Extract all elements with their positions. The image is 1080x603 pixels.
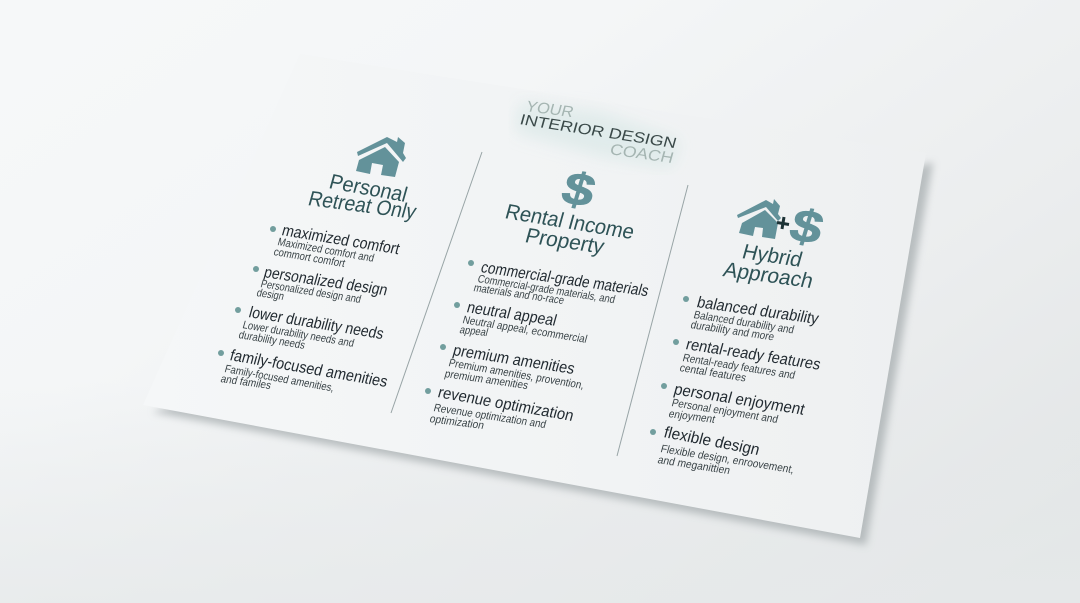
item: maximized comfort: [270, 222, 402, 270]
item: premium amenities: [440, 342, 585, 392]
item: commercial-grade materials: commercial-grade materials: [479, 259, 651, 300]
item: personal enjoyment: Personal enjoyment and: [670, 397, 779, 426]
item: lower durability needs: durability needs: [237, 329, 307, 352]
item: personalized design: design: [255, 287, 285, 303]
item: neutral appeal: neutral appeal: [465, 299, 559, 330]
item: commercial-grade materials: materials and no-race: [472, 282, 565, 307]
item: neutral appeal: appeal: [458, 324, 489, 339]
divider right: [617, 185, 688, 456]
item: family-focused amenities: family-focused amenities: [228, 347, 390, 391]
icon: small dollar: $: [784, 199, 829, 254]
item: commercial-grade materials: Commercial-grade materials, and: [476, 273, 616, 306]
item: revenue optimization: optimization: [428, 413, 485, 432]
item: maximized comfort: commort comfort: [272, 246, 346, 270]
item: premium amenities: premium amenities: [451, 342, 577, 378]
icon: dollar sign: $: [556, 162, 601, 217]
item: balanced durability: balanced durability: [695, 294, 821, 328]
icon: small house: [737, 199, 781, 239]
item: balanced durability: Balanced durability and: [692, 309, 795, 336]
item: maximized comfort: maximized comfort: [280, 222, 402, 258]
logo line: your: YOUR: [524, 98, 576, 121]
item: lower durability needs: Lower durability needs and: [241, 319, 355, 350]
item: balanced durability: durability and more: [689, 319, 775, 343]
heading: rental income property: Property: [523, 224, 607, 259]
item: rental-ready features: cental features: [678, 362, 748, 385]
item: revenue optimization: revenue optimization: [436, 384, 576, 425]
header logo: [515, 98, 680, 168]
item: personalized design: personalized design: [262, 264, 390, 299]
item: family-focused amenities: Family-focused amenities,: [223, 363, 335, 395]
item: flexible design: Flexible design, enroovement,: [659, 443, 795, 476]
item: flexible design: [650, 424, 795, 477]
panel: paper sheet: [143, 54, 926, 538]
divider left: [391, 152, 482, 413]
icon: house plus dollar: [737, 199, 829, 254]
panel: personal retreat: [218, 137, 419, 395]
item: premium amenities: Premium amenities, provention,: [447, 357, 585, 392]
item: revenue optimization: Revenue optimization and: [432, 402, 547, 431]
heading: personal retreat only: [306, 170, 419, 224]
heading: hybrid approach: Hybrid: [740, 240, 805, 272]
paper shadow: [152, 162, 933, 545]
icon: plus sign: [777, 217, 789, 229]
item: flexible design: and meganittien: [656, 454, 731, 477]
item: personalized design: Personalized design and: [259, 278, 362, 306]
item: balanced durability: [683, 294, 821, 343]
item: neutral appeal: [454, 299, 588, 346]
panel: hybrid approach: [650, 199, 829, 477]
heading: rental income property: Rental Income: [503, 200, 637, 244]
item: family-focused amenities: and familes: [219, 373, 273, 392]
background lower fade: [0, 380, 1080, 603]
heading: hybrid approach: Approach: [721, 258, 816, 293]
heading: hybrid approach: [721, 240, 816, 293]
item: premium amenities: premium amenities: [443, 368, 530, 392]
panel: rental income: [425, 162, 651, 432]
item: personal enjoyment: enjoyment: [667, 408, 716, 426]
item: rental-ready features: rental-ready features: [684, 336, 823, 374]
heading: personal retreat only: Personal: [327, 170, 410, 207]
item: flexible design: flexible design: [662, 424, 762, 459]
logo glow: [515, 102, 680, 168]
item: lower durability needs: lower durability needs: [247, 304, 386, 343]
item: rental-ready features: Rental-ready features and: [681, 352, 796, 382]
icon: house: [356, 137, 406, 177]
item: neutral appeal: Neutral appeal, ecommercial: [461, 314, 588, 346]
logo line: coach: COACH: [608, 141, 676, 167]
heading: personal retreat only: Retreat Only: [306, 187, 419, 224]
item: maximized comfort: Maximized comfort and: [276, 236, 375, 265]
item: personal enjoyment: personal enjoyment: [672, 381, 807, 419]
logo line: interior design: INTERIOR DESIGN: [518, 112, 678, 152]
